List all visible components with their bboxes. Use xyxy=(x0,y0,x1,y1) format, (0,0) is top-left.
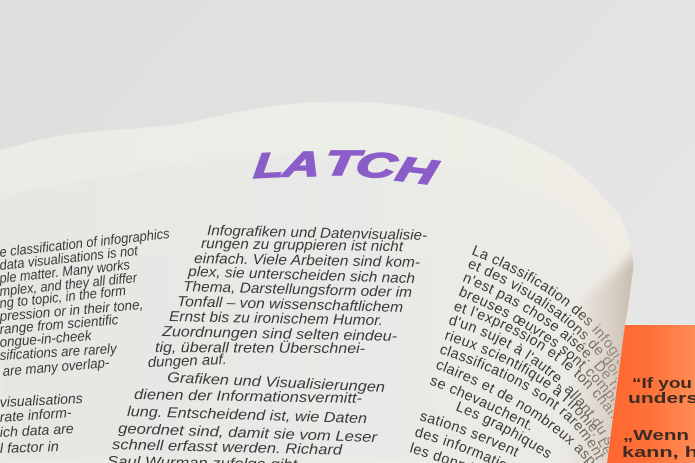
left column: English text: mplex, and they all differ xyxy=(0,269,139,299)
middle column: German text: dungen auf. xyxy=(148,352,227,371)
right column: French text: se chevauchent. xyxy=(430,378,530,430)
left column: English text: range from scientific xyxy=(0,311,119,337)
middle column: German text xyxy=(107,223,427,463)
orange page pull quote text: unders xyxy=(628,390,695,407)
middle column: German text: Zuordnungen sind selten eindeu- xyxy=(161,324,397,345)
heading: LATCH: T xyxy=(322,144,365,183)
left column: English text: e classification of infographics xyxy=(0,225,170,260)
middle column: German text: schnell erfasst werden. Richard xyxy=(112,437,343,459)
orange page pull quote text: “If you xyxy=(632,375,692,392)
right column: French text: Les graphiques xyxy=(456,401,551,458)
photo of open book spread xyxy=(0,102,695,463)
middle column: German text: geordnet sind, damit sie vom Leser xyxy=(118,421,379,446)
heading: LATCH: H xyxy=(392,150,442,193)
left column: English text: data visualisations is not xyxy=(0,242,140,273)
middle column: German text: tig, überall treten Überschnei- xyxy=(155,338,365,357)
heading: LATCH: L xyxy=(252,145,286,186)
orange page pull quote text: kann, h xyxy=(622,444,695,461)
left column: English text: rate inform- xyxy=(0,404,72,425)
left column: English text xyxy=(0,225,170,456)
middle column: German text: einfach. Viele Arbeiten sind kom- xyxy=(194,251,420,271)
middle column: German text: lung. Entscheidend ist, wie Daten xyxy=(127,404,367,427)
middle column: German text: Thema, Darstellungsform oder im xyxy=(183,279,412,301)
right column: French text: classifications sont rarement xyxy=(440,346,604,460)
left column: English text: ich data are xyxy=(0,420,74,440)
left column: English text: ng to topic, in the form xyxy=(0,282,127,311)
left column: English text: pression or in their tone, xyxy=(0,296,144,324)
heading: LATCH: C xyxy=(352,145,401,186)
heading: LATCH: A xyxy=(280,145,323,185)
white book page xyxy=(0,102,634,463)
left column: English text: sifications are rarely xyxy=(0,340,118,363)
right column: French text: sations servent xyxy=(420,413,519,457)
middle column: German text: Infografiken und Datenvisualisie- xyxy=(207,223,427,244)
middle column: German text: rungen zu gruppieren ist nicht xyxy=(201,236,404,255)
middle column: German text: plex, sie unterscheiden sich nach xyxy=(187,264,415,287)
middle column: German text: Ernst bis zu ironischem Humor. xyxy=(169,309,383,329)
right column: French text xyxy=(410,245,620,463)
orange page behind xyxy=(600,325,695,463)
orange page pull quote text xyxy=(622,375,695,461)
middle column: German text: Grafiken und Visualisierungen xyxy=(167,370,385,396)
heading: LATCH xyxy=(252,150,442,185)
middle column: German text: Tonfall – von wissenschaftlichem xyxy=(177,294,403,316)
left column: English text: l factor in xyxy=(0,438,59,456)
middle column: German text: dienen der Informationsvermitt- xyxy=(134,387,362,407)
left column: English text: ongue-in-cheek xyxy=(0,327,93,350)
left column: English text: visualisations xyxy=(0,390,83,410)
orange page pull quote text: „Wenn xyxy=(623,427,689,444)
left column: English text: are many overlap- xyxy=(2,354,110,379)
left column: English text: ple matter. Many works xyxy=(0,256,131,286)
